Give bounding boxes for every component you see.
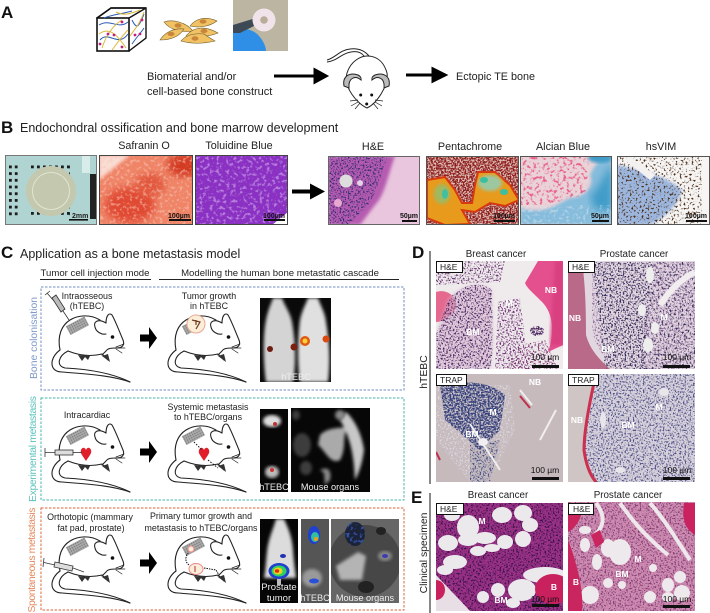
mouse primary tumor [168, 535, 246, 603]
arrow [140, 441, 157, 463]
image: D breast H&E: M [505, 298, 513, 308]
image: E breast: M [478, 516, 486, 526]
stain labels [118, 140, 676, 153]
image: D breast TRAP: 100 µm [531, 465, 559, 475]
badge H&E clinical breast [436, 504, 464, 514]
mouse with implant [52, 314, 130, 382]
image: E prostate: M [634, 554, 642, 564]
side rule and label clinical specimen: Clinical specimen [419, 512, 430, 593]
panel D: hTEBC histology [412, 243, 695, 484]
column titles: Prostate cancer [594, 490, 663, 501]
arrow to mouse [274, 70, 326, 82]
heading C: Application as a bone metastasis model [20, 247, 240, 261]
image: D prostate TRAP [568, 374, 695, 482]
construct caption: Biomaterial and/or [147, 71, 237, 83]
image: mouse organs luminescence: Mouse organs [336, 593, 395, 603]
labels systemic metastasis [168, 402, 249, 422]
labels: Intraosseous [62, 291, 113, 301]
icon: scaffold cube [97, 8, 146, 51]
badge TRAP prostate: TRAP [572, 375, 595, 385]
side label experimental: Experimental metastasis [28, 396, 39, 502]
image: E prostate: 100 µm [663, 594, 691, 604]
labels orthotopic [47, 512, 133, 533]
arrow B [292, 184, 325, 200]
column header: injection mode: Tumor cell injection mode [41, 268, 149, 279]
image: mouse organs IVIS [291, 408, 370, 492]
image: E prostate: BM [615, 569, 629, 579]
column titles: Breast cancer [466, 249, 527, 260]
panel: experimental metastasis [28, 396, 404, 502]
column titles: Prostate cancer [600, 249, 669, 260]
badge TRAP [436, 374, 466, 386]
badge H&E clinical prostate [568, 504, 594, 514]
badge H&E clinical breast: H&E [440, 504, 458, 514]
result label: Ectopic TE bone [456, 71, 535, 83]
labels primary tumor: Primary tumor growth and [150, 511, 252, 521]
image: construct photo [5, 155, 97, 225]
construct caption: cell-based bone construct [147, 86, 272, 98]
image: E prostate [568, 502, 695, 611]
image: mouse organs luminescence [331, 519, 399, 603]
image: Safranin O [99, 155, 193, 225]
stain labels: Toluidine Blue [205, 140, 273, 152]
badge TRAP prostate [568, 374, 598, 386]
labels orthotopic: Orthotopic (mammary [47, 512, 133, 522]
icon: mouse top view [327, 49, 389, 109]
image: prostate tumor: tumor [267, 593, 291, 604]
image: D prostate H&E [568, 261, 695, 369]
image: D breast TRAP: BM [465, 429, 479, 439]
image: Toluidine Blue [195, 155, 288, 225]
image: hTEBC luminescence: hTEBC [300, 593, 330, 603]
image: D prostate TRAP: BM [621, 420, 635, 430]
column header: cascade: Modelling the human bone metastatic cascade [181, 268, 379, 279]
side rule and label clinical specimen [419, 493, 430, 613]
image: hsVIM [617, 156, 710, 225]
icon: spindle cells [160, 18, 218, 43]
image: Toluidine Blue: 100µm [263, 213, 285, 220]
image: prostate tumor: Prostate [261, 582, 297, 593]
labels primary tumor [145, 511, 258, 533]
labels orthotopic: fat pad, prostate) [57, 523, 125, 533]
image: E prostate: B [573, 577, 579, 587]
image: D breast TRAP: M [489, 407, 497, 417]
image: hTEBC IVIS [259, 409, 289, 492]
badge H&E clinical prostate: H&E [573, 504, 591, 514]
badge H&E prostate: H&E [572, 262, 590, 272]
image: D breast H&E: 100 µm [531, 352, 559, 362]
panel letter E: E [411, 488, 422, 507]
image: D prostate TRAP: 100 µm [663, 465, 691, 475]
labels: (hTEBC) [70, 301, 104, 311]
image: E breast [436, 503, 563, 611]
icon: syringe intraosseous [45, 291, 69, 320]
stain labels: Alcian Blue [536, 141, 590, 153]
image: hTEBC IVIS: hTEBC [259, 482, 289, 492]
mouse intracardiac with syringe and heart [45, 424, 130, 492]
dashed frame teal [41, 398, 404, 500]
column titles [468, 490, 663, 501]
image: Alcian Blue [520, 156, 612, 225]
labels tumor growth [182, 291, 236, 311]
labels systemic metastasis: to hTEBC/organs [174, 412, 243, 422]
image: D prostate H&E: 100 µm [663, 352, 691, 362]
stain labels: Safranin O [118, 140, 170, 152]
labels [62, 291, 113, 311]
column titles: Breast cancer [468, 490, 529, 501]
image: Alcian Blue: 50µm [591, 213, 609, 220]
image: D prostate H&E: BM [601, 344, 615, 354]
image: E breast: BM [494, 595, 508, 605]
image: D breast TRAP [436, 374, 563, 482]
image: Pentachrome: 100µm [493, 213, 515, 220]
label intracardiac: Intracardiac [64, 410, 111, 420]
image: D breast H&E: BM [466, 327, 480, 337]
image: bioluminescence two mice [260, 298, 331, 382]
image: Pentachrome [426, 156, 519, 225]
image: D prostate H&E: NB [569, 313, 581, 323]
side label bone colonisation: Bone colonisation [29, 297, 40, 379]
panel letter B: B [1, 118, 13, 137]
image: H&E: 50µm [400, 213, 418, 220]
panel: spontaneous metastasis [27, 508, 404, 612]
heading B: Endochondral ossification and bone marrow development [20, 121, 339, 135]
column titles [466, 249, 669, 260]
dashed frame blue [41, 287, 404, 390]
mouse systemic metastasis [168, 424, 246, 492]
image: hsVIM: 100µm [685, 213, 707, 220]
arrow to result [406, 69, 445, 81]
labels tumor growth: Tumor growth [182, 291, 236, 301]
image: D breast H&E: NB [545, 285, 557, 295]
photo: construct held with gloved fingers [233, 0, 288, 51]
stain labels: H&E [362, 141, 384, 153]
labels primary tumor: metastasis to hTEBC/organs [145, 523, 258, 533]
image: bioluminescence two mice: hTEBC [281, 372, 311, 382]
panel letter D: D [412, 243, 424, 262]
panel C: application as bone metastasis model [1, 243, 404, 612]
stain labels: Pentachrome [438, 141, 502, 153]
image: E breast: 100 µm [531, 594, 559, 604]
image: Safranin O: 100µm [168, 213, 190, 220]
mouse with tumor growth [168, 314, 246, 382]
badge H&E [436, 262, 462, 272]
image: E breast: B [551, 582, 557, 592]
image: H&E [328, 156, 420, 225]
image: prostate tumor [260, 519, 298, 604]
image: D breast TRAP: NB [529, 377, 541, 387]
panel E: clinical specimen histology [411, 488, 695, 613]
arrow [140, 327, 157, 349]
panel letter C: C [1, 243, 13, 262]
badge H&E: H&E [440, 262, 458, 272]
badge H&E prostate [568, 262, 594, 272]
side label spontaneous: Spontaneous metastasis [27, 508, 38, 612]
stain labels: hsVIM [646, 141, 676, 153]
image: D prostate H&E: M [660, 312, 668, 322]
labels tumor growth: in hTEBC [190, 301, 229, 311]
side rule and label hTEBC: hTEBC [419, 355, 430, 389]
panel letter A: A [1, 3, 13, 22]
image: D prostate TRAP: M [655, 402, 663, 412]
dashed frame orange [41, 508, 404, 610]
panel B: endochondral ossification [1, 118, 710, 225]
image: D breast H&E [436, 261, 563, 369]
image: D prostate TRAP: NB [571, 415, 583, 425]
image: hTEBC luminescence [300, 519, 330, 603]
panel A: biomaterial construct to ectopic bone [1, 0, 535, 109]
badge TRAP: TRAP [440, 375, 463, 385]
labels systemic metastasis: Systemic metastasis [168, 402, 249, 412]
image: mouse organs IVIS: Mouse organs [301, 482, 360, 492]
panel: bone colonisation [29, 287, 404, 390]
construct caption [147, 71, 272, 98]
arrow [140, 552, 157, 574]
image: construct photo: 2mm [72, 213, 88, 220]
mouse orthotopic with syringe [43, 535, 130, 603]
